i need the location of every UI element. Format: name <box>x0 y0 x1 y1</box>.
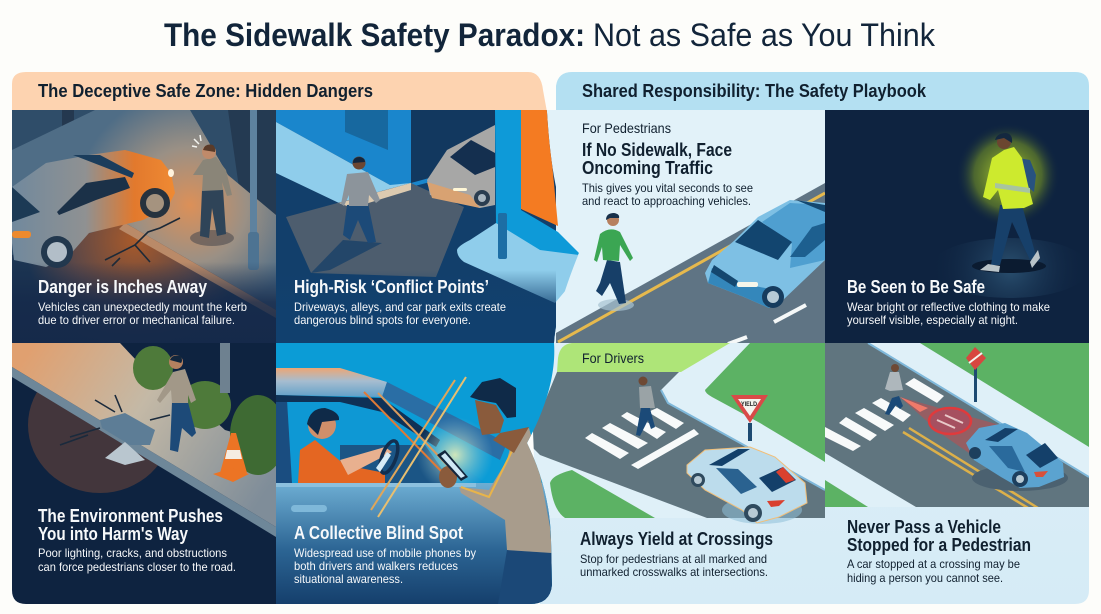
scene: environment pushes you <box>12 343 286 604</box>
pedestrian in green <box>594 213 634 311</box>
scene: danger inches away <box>12 110 276 343</box>
cabin window <box>276 395 485 483</box>
text: blind spot: both drivers and walkers reduces <box>294 559 458 573</box>
road junction <box>528 372 825 518</box>
blue pillar and wedge <box>495 110 579 300</box>
yield sign <box>731 395 768 441</box>
crashed car <box>12 150 175 268</box>
sightline crossing lines <box>364 377 466 517</box>
road light pool <box>28 357 172 493</box>
smartphone <box>437 450 468 481</box>
road <box>825 343 1089 507</box>
pedestrian on phone <box>190 135 234 246</box>
tip: never pass: Never Pass a Vehicle <box>847 517 1001 537</box>
playbook heading: Shared Responsibility: The Safety Playbook <box>582 81 927 101</box>
road <box>556 183 825 343</box>
walking pedestrian <box>636 376 655 436</box>
driveway headlight beam <box>286 183 464 277</box>
scene: yield at crossings <box>520 343 825 518</box>
walker in hi-vis jacket <box>980 133 1040 272</box>
tip: face oncoming traffic: If No Sidewalk, Face <box>582 140 732 160</box>
tip: never pass: A car stopped at a crossing may be <box>847 557 1020 571</box>
text: conflict points: dangerous blind spots for everyone. <box>294 313 471 327</box>
panel: shared responsibility playbook <box>520 72 1090 604</box>
window <box>345 110 388 150</box>
text: environment: can force pedestrians closer to the road. <box>38 560 236 574</box>
SUV emerging <box>427 125 495 208</box>
text: environment <box>38 506 236 574</box>
building wall <box>276 110 495 187</box>
lamp post <box>250 110 257 232</box>
text: danger is inches away: due to driver error or mechanical failure. <box>38 313 235 327</box>
panel: deceptive safe zone <box>12 72 579 604</box>
orange wall <box>521 110 558 226</box>
text: blind spot: situational awareness. <box>294 572 403 586</box>
text: conflict points: Driveways, alleys, and car park exits create <box>294 300 506 314</box>
warning beam and marking <box>900 397 998 453</box>
dark garage <box>411 110 495 183</box>
tip: face oncoming traffic: This gives you vital seconds to see <box>582 181 753 195</box>
driver <box>298 408 401 483</box>
alert marks <box>192 135 201 147</box>
phone light glow <box>417 417 493 493</box>
sidewalk <box>12 343 276 527</box>
roadside bushes <box>133 346 286 475</box>
pavement <box>276 122 411 203</box>
tip: yield at crossings <box>580 529 773 579</box>
tip: face oncoming traffic <box>582 140 753 208</box>
header band <box>12 72 552 110</box>
title: The Sidewalk Safety Paradox: <box>164 17 585 53</box>
text: danger is inches away <box>38 277 247 327</box>
tip: be seen: Wear bright or reflective clothing to make <box>847 300 1050 314</box>
scene: conflict points <box>276 110 579 343</box>
door handle <box>291 505 327 512</box>
tip: never pass <box>847 517 1031 585</box>
pavement cracks <box>105 218 180 266</box>
text: environment: The Environment Pushes <box>38 506 223 526</box>
tip: be seen: Be Seen to Be Safe <box>847 277 985 297</box>
For Drivers tab <box>557 343 730 372</box>
tip: yield at crossings: Always Yield at Crossings <box>580 529 773 549</box>
walking man <box>311 156 382 273</box>
car roof <box>276 368 387 397</box>
curb edge <box>868 343 1089 477</box>
kerb line <box>661 390 825 490</box>
text: environment: You into Harm's Way <box>38 524 188 544</box>
corner pavement <box>457 223 579 303</box>
text: environment: Poor lighting, cracks, and obstructions <box>38 546 227 560</box>
wall post <box>62 110 74 126</box>
diamond warning sign <box>966 347 986 402</box>
crosswalk stripes <box>825 378 944 451</box>
text: conflict points: High-Risk ‘Conflict Points’ <box>294 277 489 297</box>
dashboard shadow <box>340 445 452 483</box>
text: blind spot <box>294 523 476 586</box>
sidewalk <box>12 110 276 310</box>
text: danger is inches away: Danger is Inches Away <box>38 277 207 297</box>
kerb <box>119 223 276 318</box>
yellow road edge line <box>558 193 825 342</box>
kerb <box>12 367 276 537</box>
tip: be seen <box>847 277 1050 327</box>
A-pillar <box>382 382 507 460</box>
tip: face oncoming traffic: and react to approaching vehicles. <box>582 194 751 208</box>
tip: yield at crossings: Stop for pedestrians at all marked and <box>580 552 767 566</box>
door <box>276 483 556 604</box>
tip: never pass: Stopped for a Pedestrian <box>847 535 1031 555</box>
title: Not as Safe as You Think <box>593 17 936 53</box>
scene: pedestrian facing traffic <box>556 183 825 343</box>
playbook header band <box>520 72 1089 110</box>
lane dashes <box>728 305 806 344</box>
crosswalk <box>585 408 699 469</box>
back wall <box>228 110 276 215</box>
green verge <box>920 343 1089 447</box>
silver car with brake lights <box>687 447 807 524</box>
text: danger is inches away: Vehicles can unexpectedly mount the kerb <box>38 300 247 314</box>
text: conflict points <box>294 277 506 327</box>
pedestrian <box>885 364 903 415</box>
yield sign: YIELD <box>741 402 758 408</box>
road <box>12 224 232 304</box>
walking man <box>157 355 196 452</box>
title <box>164 17 936 53</box>
bollard <box>498 213 507 259</box>
label: for drivers: For Drivers <box>582 350 644 366</box>
tip: be seen: yourself visible, especially at night. <box>847 313 1018 327</box>
tip: face oncoming traffic: Oncoming Traffic <box>582 158 713 178</box>
label: for pedestrians: For Pedestrians <box>582 120 671 136</box>
scene: collective blind spot <box>276 343 556 604</box>
scene: reflective clothing at night <box>825 110 1090 343</box>
heading: hidden dangers: The Deceptive Safe Zone: Hidden Dangers <box>38 81 373 101</box>
scene: never pass a stopped vehicle <box>825 343 1089 508</box>
green verge bottom left <box>550 470 655 518</box>
text: blind spot: Widespread use of mobile phones by <box>294 546 476 560</box>
utility post <box>220 343 230 393</box>
tip: yield at crossings: unmarked crosswalks at intersections. <box>580 565 768 579</box>
blue stopped car <box>966 423 1068 491</box>
tip: never pass: hiding a person you cannot see. <box>847 571 1003 585</box>
double yellow line <box>903 428 1038 508</box>
broken slab <box>60 395 170 465</box>
blue car <box>705 200 825 308</box>
green verge top right <box>705 343 825 462</box>
pedestrian with phone <box>437 378 552 604</box>
traffic cone <box>213 433 249 482</box>
text: blind spot: A Collective Blind Spot <box>294 523 463 543</box>
